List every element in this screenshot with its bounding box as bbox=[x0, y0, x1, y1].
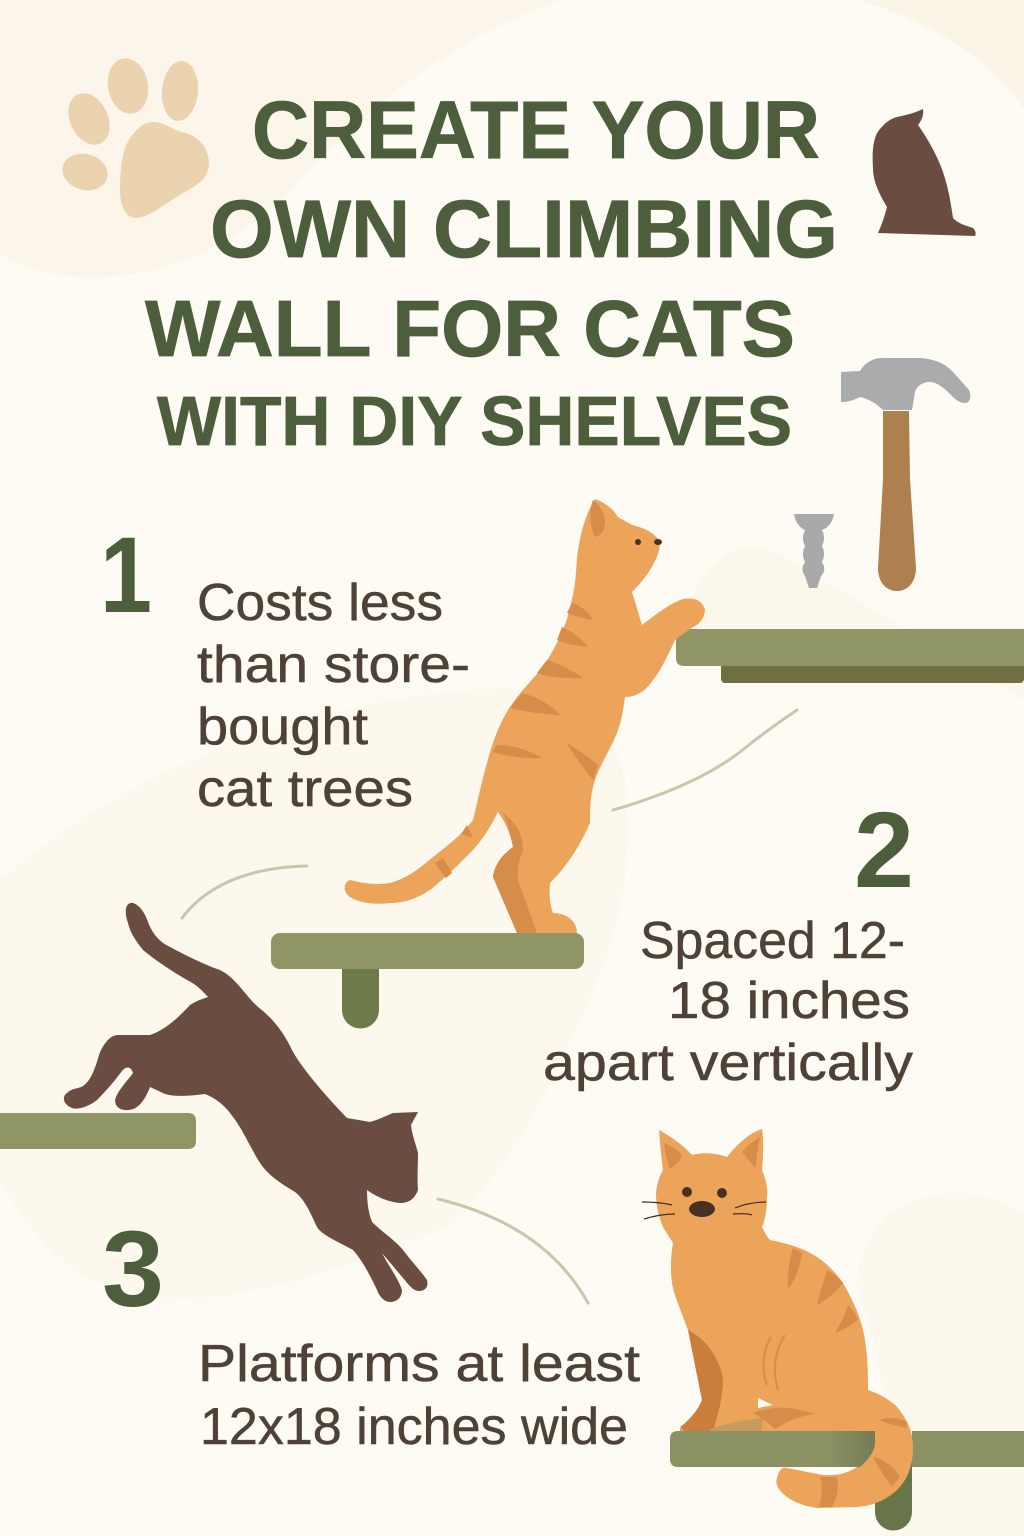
shelf: top bbox=[676, 629, 1024, 683]
face: eyes, nose, whiskers bbox=[642, 1187, 766, 1219]
title: OWN CLIMBING bbox=[210, 184, 838, 275]
eye and nose bbox=[635, 539, 662, 545]
text block: step 2: apart vertically bbox=[543, 1034, 913, 1092]
icon: paw print bbox=[58, 55, 209, 218]
number 1: 1 bbox=[100, 514, 152, 635]
title: CREATE YOUR bbox=[252, 85, 820, 176]
icon: hammer bbox=[841, 358, 970, 591]
text block: step 2: 18 inches bbox=[668, 972, 910, 1030]
text block: step 1: bought bbox=[197, 698, 369, 756]
cat: leaping brown silhouette bbox=[64, 903, 427, 1302]
shelf: bottom front bbox=[670, 1431, 875, 1467]
cat: sitting orange tabby bbox=[642, 1129, 913, 1508]
title bbox=[145, 85, 838, 460]
text block: step 3: Platforms at least bbox=[198, 1335, 641, 1393]
shelf: middle bbox=[271, 933, 584, 1028]
text block: step 3: 12x18 inches wide bbox=[200, 1398, 628, 1456]
arrow: curve below leaping cat bbox=[438, 1199, 588, 1303]
icon: screw bbox=[794, 514, 834, 588]
shelf: left bbox=[0, 1113, 196, 1149]
number 3: 3 bbox=[102, 1208, 164, 1329]
arrow: curve to leaping cat bbox=[182, 866, 307, 918]
text block: step 1: than store- bbox=[197, 636, 470, 694]
cat: standing orange tabby bbox=[345, 499, 705, 933]
arrow: curve to top shelf bbox=[613, 710, 797, 810]
icon: cat silhouette top right bbox=[873, 109, 976, 236]
text block: step 1: Costs less bbox=[197, 574, 443, 632]
shelf: bottom bbox=[875, 1431, 1024, 1530]
title: WITH DIY SHELVES bbox=[157, 382, 792, 460]
number 2: 2 bbox=[854, 789, 914, 910]
text block: step 2: Spaced 12- bbox=[640, 912, 905, 970]
title: WALL FOR CATS bbox=[145, 284, 795, 373]
text block: step 1: cat trees bbox=[197, 760, 413, 818]
